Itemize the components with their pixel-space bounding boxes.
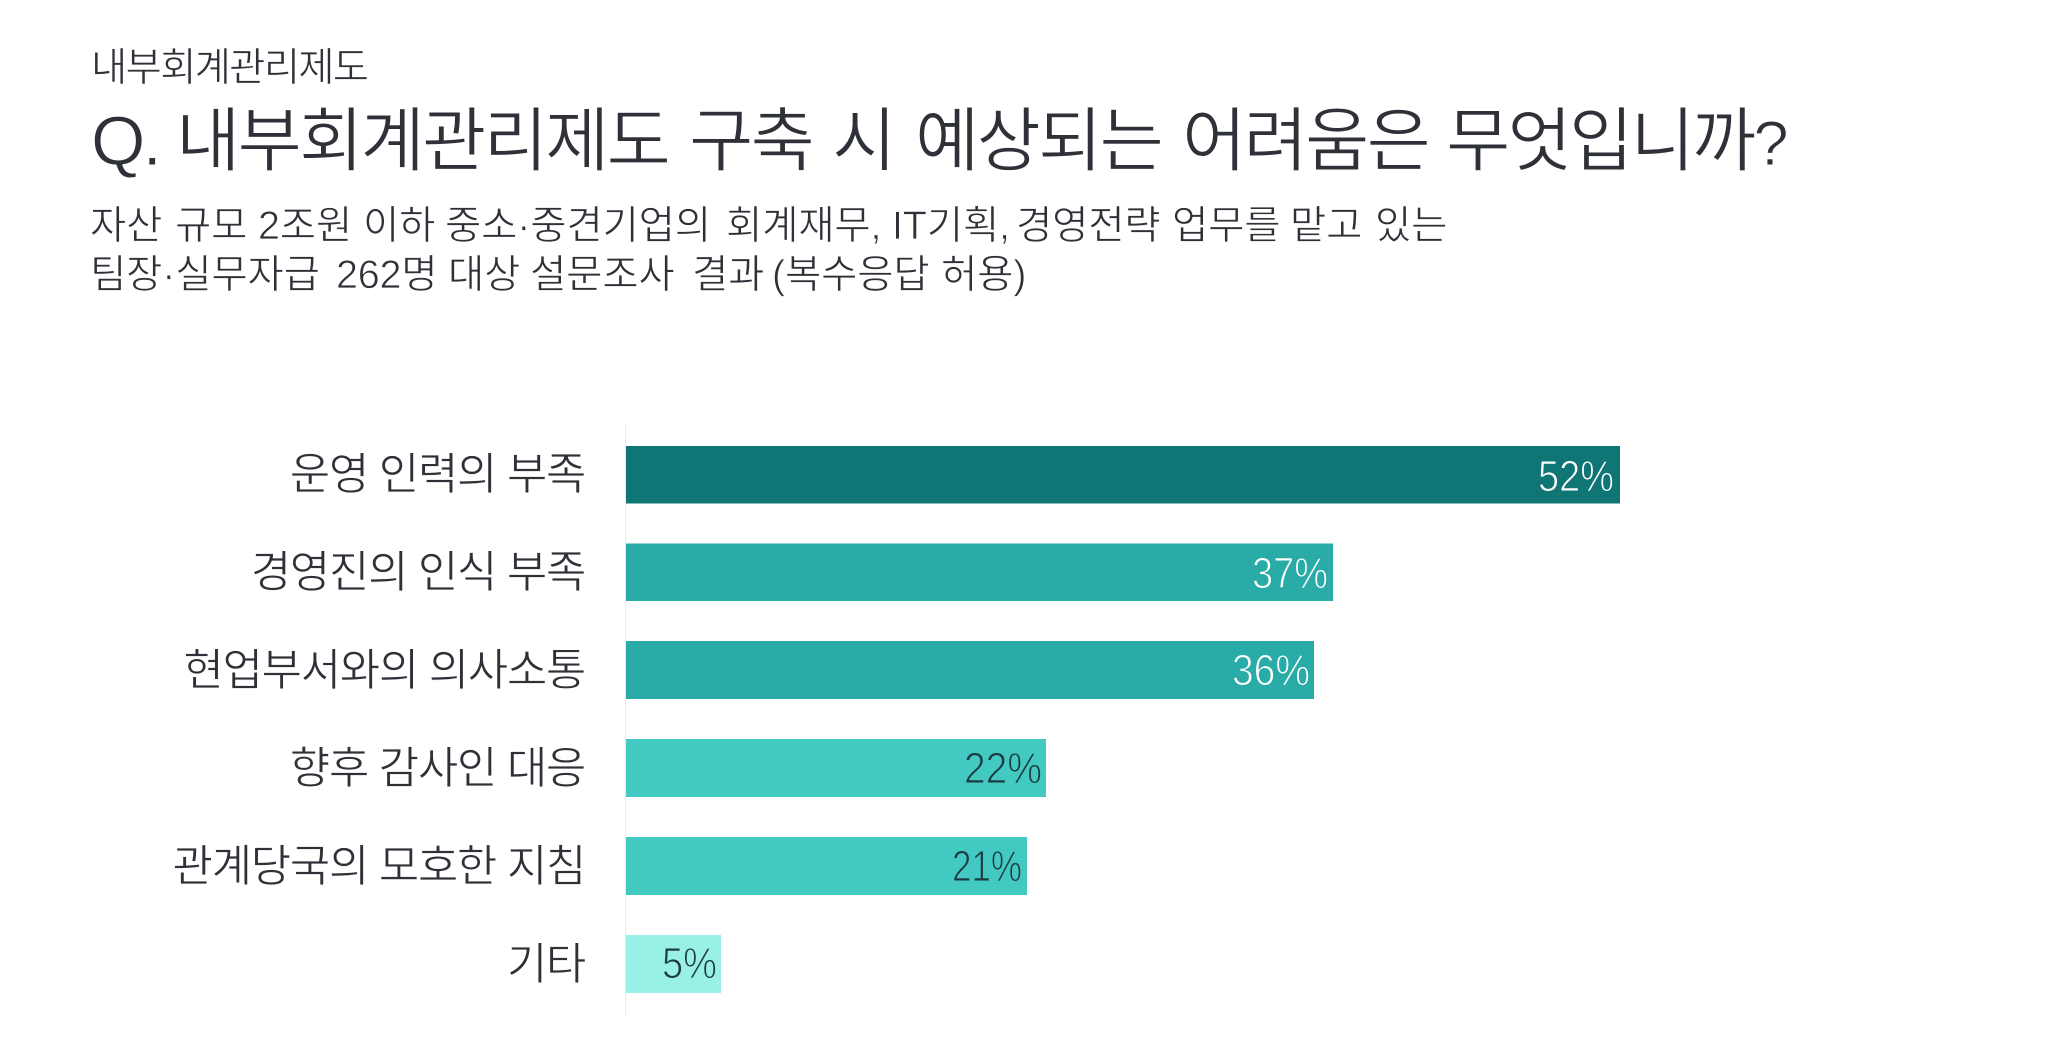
- row: 현업부서와의 의사소통 36%: [183, 641, 1314, 699]
- title question: 구축: [689, 102, 812, 180]
- value: 5%: [662, 939, 717, 988]
- row: 경영진의 인식 부족 37%: [251, 544, 1333, 601]
- title question: 예상되는: [915, 102, 1161, 180]
- subtitle line 1: 이하: [363, 204, 435, 248]
- subtitle line 1: 규모: [175, 204, 247, 248]
- subtitle line 1: 자산: [90, 204, 162, 248]
- label: 경영진의 인식 부족: [251, 548, 585, 597]
- subtitle line 2: 허용): [941, 253, 1026, 297]
- label: 기타: [507, 940, 586, 989]
- title question: 무엇입니까: [1446, 102, 1755, 180]
- subtitle line 1: IT기획,: [892, 204, 1010, 248]
- value: 36%: [1232, 646, 1310, 695]
- label: 향후 감사인 대응: [290, 744, 585, 793]
- subtitle line 1: 중소·중견기업의: [445, 204, 711, 248]
- bar: [626, 739, 1046, 797]
- subtitle line 2: 262명: [336, 253, 437, 297]
- label: 운영 인력의 부족: [290, 450, 585, 499]
- title question: ?: [1754, 109, 1786, 179]
- subtitle line 1: 있는: [1375, 204, 1447, 248]
- label: 현업부서와의 의사소통: [183, 646, 585, 695]
- bar: [626, 837, 1027, 895]
- row: 기타 5%: [507, 935, 721, 993]
- bar: [626, 641, 1314, 699]
- subtitle line 2: 설문조사: [530, 253, 675, 297]
- bar chart: [173, 425, 1620, 1016]
- title question: 내부회계관리제도: [176, 102, 668, 180]
- subtitle line 1: 업무를: [1172, 204, 1280, 248]
- title question: 시: [832, 102, 894, 180]
- label: 관계당국의 모호한 지침: [173, 842, 585, 891]
- row: 운영 인력의 부족 52%: [290, 446, 1620, 504]
- row: 관계당국의 모호한 지침 21%: [173, 837, 1027, 895]
- bar: [626, 446, 1620, 504]
- subtitle line 2: 대상: [448, 253, 520, 297]
- value: 22%: [964, 744, 1042, 793]
- row: 향후 감사인 대응 22%: [290, 739, 1046, 797]
- subtitle line 1: 경영전략: [1016, 204, 1161, 248]
- value: 52%: [1538, 452, 1614, 501]
- section label: 내부회계관리제도: [91, 46, 368, 90]
- value: 21%: [952, 842, 1022, 891]
- subtitle line 1: 맡고: [1290, 204, 1362, 248]
- subtitle line 2: 팀장·실무자급: [90, 253, 320, 297]
- header: [90, 46, 1786, 297]
- title question: Q.: [91, 102, 159, 180]
- value: 37%: [1252, 549, 1328, 598]
- title question: 어려움은: [1182, 102, 1428, 180]
- subtitle line 1: 2조원: [258, 204, 352, 248]
- subtitle line 1: 회계재무,: [726, 204, 881, 248]
- subtitle line 2: 결과: [692, 253, 764, 297]
- subtitle line 2: (복수응답: [772, 253, 930, 297]
- bar: [626, 544, 1333, 601]
- bar: [626, 935, 721, 993]
